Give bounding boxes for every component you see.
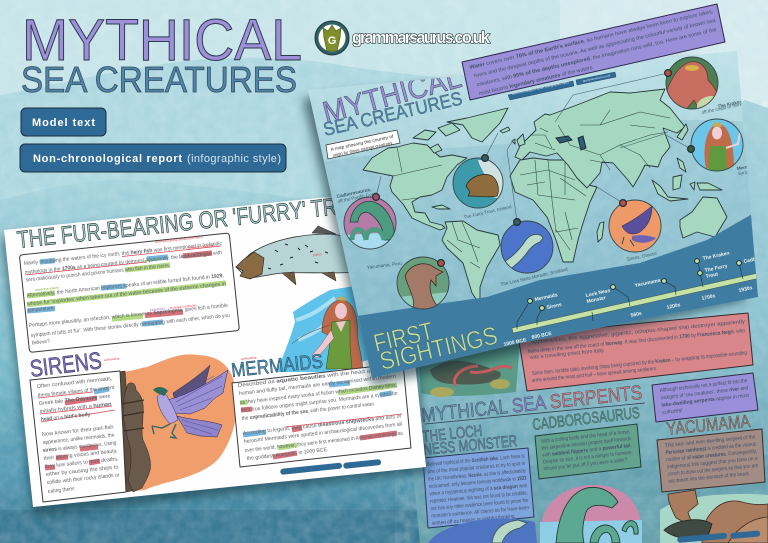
brown text box: yacumama: This sea- and river-dwelling serpent of the [665,434,756,449]
purple text box: river serpents [652,373,758,422]
africa [510,158,597,262]
blue text box: loch ness: the UK! Nonetheless, Nessie, as she is affectionately [428,468,526,483]
band: first sightings [358,215,758,378]
brown text box: yacumama [657,429,765,492]
brown text box: yacumama: mother of all water creatures. Consequently, [666,449,758,463]
green text box: cadborosaurus: With a coiling body and the head of a horse, [541,429,631,445]
blue text box: loch ness: when a mysterious sighting of a sea dragon was [428,483,528,498]
timeline: Sirens [546,302,563,311]
text box: sirens: Now known for their part-fish [42,424,114,438]
text box: sirens: collide with their rocky islands or [47,472,120,486]
text box: furry trout [19,233,239,352]
australia [680,197,727,238]
creature label: sirens: Sirens, Greece [626,251,658,262]
brown text box: yacumama: not drawn into the stomach of the beast. [668,471,750,485]
map title: SEA CREATURES [321,88,464,141]
heading: sirens: subheading [104,356,120,362]
text box: furry trout: Alternatively, the North American explorers speaks of an edible furred fish found in 1929, [27,273,225,299]
text box: furry trout: passive voice [143,257,161,263]
map title: MYTHICAL [319,61,465,130]
illustration: cadborosaurus [540,485,642,543]
illustration: furry trout: potion [313,252,322,257]
green text box: cadborosaurus: with webbed flippers and a powerful tail. [541,443,632,459]
creature circle: furry trout [453,155,505,208]
text box: mermaids: their true folklore origins might surprise you. Mermaids are a symbol for [241,391,398,414]
creature circle: kraken [665,57,720,112]
heading: the loch ness monster: THE LOCH [422,423,483,446]
map caption [326,130,400,159]
label: model text [21,108,106,136]
heading: the loch ness monster [422,423,518,459]
timeline: Mermaids [534,292,558,303]
shadow under report sheet [2,196,430,516]
connector lines [376,74,688,218]
panel: world map sheet [300,50,768,390]
creature circle: cadborosaurus [344,194,396,250]
text box: mermaids: the unpredictability of the sea, with the power to control water. [242,401,375,422]
madagascar [597,222,604,242]
blue text box: loch ness: monster's existence. All claims so far have been [431,505,529,520]
footer pills: serpents sheet [677,530,760,543]
label: model text: Model text [32,117,95,129]
south east asia islands [652,158,722,201]
greenland [447,108,508,142]
south america [442,220,500,299]
purple text box: river serpents: lake-dwelling serpents appear in most [661,393,750,409]
creature circle: siren [609,200,661,252]
illustration: siren bird [152,365,228,438]
new zealand [711,225,744,245]
text box: furry trout: Mainly occupying the waters of the icy north, this hairy fish was first mentioned in Icelandic [24,241,222,267]
text box: mermaids: the goddess Atargatis, in 1000 BCE. [247,447,329,462]
timeline: 800 BCE [531,331,553,341]
map caption: origin for these strange creatures. [332,140,394,158]
footer pills: map sheet: grammarsaurus.co.uk [582,73,611,83]
purple intro box: most bizarre legendary creatures of the waters. [478,65,595,97]
creature label: kraken: The Kraken [717,99,743,109]
shadow under map sheet [303,60,745,386]
text box: sirens: Greek tale The Odyssey were [39,393,111,407]
purple text box: river serpents: Although technically not a perfect fit into the [660,378,748,394]
creature circle: mermaid [688,119,743,175]
heading: mermaids: MERMAIDS [230,350,324,382]
red text box: the kraken: arms around the mast and hull – have spread among seafarers. [532,366,658,384]
text box: furry trout: embossed giving factual information [155,235,203,244]
label: non-chronological report: (infographic style) [187,153,281,165]
logo: grammarsaurus: grammarsaurus.co.uk [352,29,491,47]
text box: sirens: appearance, unlike mermaids, the [43,432,115,446]
blue text box: loch ness: written off as hoaxes or wishful thinking. [431,514,516,527]
timeline: Yacumama [634,278,661,289]
main title: SEA CREATURES [21,59,297,100]
timeline: Trout [705,271,719,280]
red text box: the kraken: was a travelling priest from Italy. [529,348,605,361]
illustration: furry trout [236,226,360,285]
heading: first sightings [374,322,498,370]
panel: furry trout, sirens and mermaids sheet [4,189,426,507]
text box: furry trout: technical vocabulary [188,243,216,250]
british isles [512,134,525,146]
heading: first sightings: FIRST [371,317,436,358]
text box: sirens: their alluring voices and beauty, [44,448,118,462]
japan [677,124,688,140]
illustration: bound sailor [118,371,151,492]
text box: sirens: Often confused with mermaids, [37,376,113,390]
main title: MYTHICAL [22,8,302,73]
creature label: mermaids [736,166,748,176]
purple text box: river serpents: cultures! [662,408,683,416]
heading: sirens: SIRENS [28,347,103,383]
timeline: 1930s [738,285,753,294]
text box: furry trout: sent maliciously to punish and poison humans who fish in the rivers. [26,263,170,283]
creature label: mermaids: Mermaids, [736,163,760,171]
text box: sirens: eating them! [48,486,76,495]
text box: mermaids: human and fluffy tail, mermaids are easily recognised within modern [239,374,396,397]
text box: sirens: they lure sailors to their deaths, [45,456,119,470]
brown text box: yacumama: indigenous folk suggest that you blow on a [667,456,758,470]
text box: sirens: initially hybrids with a human [40,401,112,415]
cuba [432,205,450,209]
text box: furry trout: technical vocabulary [170,303,198,310]
logo: grammarsaurus [315,21,491,55]
blue text box: loch ness: nor has any other evidence been found to prove the [431,498,529,512]
creature label: furry trout: The Furry Trout, Iceland [463,204,512,220]
timeline: Lock Ness [585,288,611,299]
blue text box: loch ness: reported. However, this was not found to be credible, [430,490,528,505]
blue text box: loch ness: Beloved mythical of the Scottish lake, Loch Ness is [427,453,525,468]
green text box: cadborosaurus: Despite its size, it is not a danger to humans. [543,450,633,466]
heading: the loch ness monster: NESS MONSTER [423,433,518,459]
purple intro box: rivers and the deepest depths of the oceans. As well as appreciating the colourful variety of known sea [473,18,716,79]
black and caspian seas [556,136,586,150]
kraken illustration [417,340,520,397]
map caption: A map showing the country of [330,134,395,152]
red text box: the kraken [518,313,753,391]
timeline: 1700s [701,293,716,302]
footer pills: map sheet: Non-chronological report (infographic style) [511,80,569,96]
red text box: the kraken: hides deep in the sea off the coast of Norway. It was first documented in 1700 by Francesca Negri, who [528,328,745,355]
blue text box: loch ness: one of the most popular creatures to try to spot in [427,461,525,475]
creature circle: loch ness monster [501,219,553,273]
text box: furry trout: respective adverb [35,286,59,292]
heading: yacumama: YACUMAMA [665,411,751,439]
creature label: cadborosaurus: off the Pacific Coast [337,190,379,204]
purple intro box: creatures, with 95% of the depths unexplored, the imagination runs wild, too. Here are some of the [476,27,717,88]
green text box: cadborosaurus [535,424,641,479]
text box: mermaids: over the world; however, they were first mentioned in Assyrian mythology as [245,431,404,454]
arctic islands [413,123,460,153]
illustration: mermaid [277,280,400,374]
blue text box: loch ness: nicknamed, only became famous worldwide in 1933 [429,476,527,490]
heading: cadborosaurus: CADBOROSAURUS [532,405,641,434]
creature label: yacumama: Yacumama, Peru [367,261,402,270]
text box: furry trout: mythology in the 1700s as a being created by demons! Apparently, the landvættirgan with [25,250,222,276]
logo: grammarsaurus: G [328,35,336,47]
footer pills: map sheet [508,72,616,100]
text box: sirens: these female villains of the ancient [38,385,115,399]
creature label: cadborosaurus: Cadborosaurus, [336,187,372,199]
timeline: 1200s [666,302,681,311]
text box: furry trout: symptom of tufts of 'fur'. With these stories directly overlapping with each other, which do you [31,313,230,339]
panel: sea serpents sheet [395,100,768,543]
illustration: orange blob [120,354,237,492]
creature label: loch ness: The Lock Ness Monster, Scotland [500,267,569,287]
red text box: the kraken: Since then, terrible tales involving ships being capsized by the Kraken – by wrapping its impossible-sounding [532,350,747,377]
creature circle: yacumama [397,257,450,310]
text box: mermaids: heroism! Mermaids were spotted in archaeological discoveries from all [244,422,402,445]
timeline: The Kraken [702,250,730,262]
heading: furry trout: THE FUR-BEARING OR 'FURRY' TROUT [16,189,379,254]
text box: mermaids: Described as aquatic beauties with the head and upper [238,366,396,389]
purple intro box [462,4,725,100]
text box: mermaids: According to legend, they cause disastrous shipwrecks and acts of [243,414,402,437]
text box: mermaids [232,363,411,467]
text box: furry trout: Perhaps more plausibly, an infection, which is known as Saprolegnia, gives fish a horrible [29,303,228,329]
timeline: 560s [630,311,643,319]
text box: sirens: sirens is always murderous. Using [43,440,117,454]
timeline: The Furry [704,263,728,274]
illustration: loch ness monster [428,519,537,543]
red text box: the kraken: appearances, this aggressive, gigantic, octopus-shaped ship destroyer apparently [531,319,746,346]
text box: mermaids: as they have inspired many works of fiction which includes Disney films. [240,383,397,406]
timeline [503,250,768,348]
iceland [500,127,510,133]
brown text box: yacumama: Peruvian rainforest is credited as the vicious [665,441,757,456]
timeline: Monster [586,295,606,305]
main title [21,8,302,100]
label: non-chronological report [20,144,286,172]
text box: furry trout: believe? [32,339,50,346]
creature label: kraken: off the coast of Norway [701,100,749,115]
green text box: cadborosaurus: this serpentine monster propels itself forwards [541,436,632,452]
text box: sirens: head on a bird's body. [41,412,92,423]
text box: sirens: either by causing the ships to [46,464,119,478]
label: non-chronological report: Non-chronological report [33,153,182,165]
text box: furry trout: temperature. [28,305,55,314]
green text box: cadborosaurus: Would you be put off if you were a sailor? [544,457,628,472]
north america [363,143,467,230]
country borders [378,147,480,268]
purple intro box: Water covers over 70% of the Earth's surface, so humans have always been keen to explore lakes, [469,9,715,71]
text box: furry trout: parenthesis [150,306,166,312]
creature label: mermaids: Syria [737,170,749,176]
illustration: yacumama [660,490,768,543]
text box: sirens [30,371,126,502]
purple text box: river serpents: category of 'sea creatures', these river and [660,385,748,401]
timeline: 1000 BCE [503,337,528,348]
eurasia [515,89,685,188]
heading: mythical sea serpents: MYTHICAL SEA SERPENTS [420,382,643,427]
world map [363,89,744,312]
text box: furry trout: whose fur 'explodes' when taken out of the water because of the extreme changes in [26,281,226,308]
heading: first sightings: SIGHTINGS [377,322,500,376]
footer pills: report sheet [280,459,381,475]
blue text box: loch ness [423,448,534,528]
heading: mermaids: subheading [241,355,257,361]
